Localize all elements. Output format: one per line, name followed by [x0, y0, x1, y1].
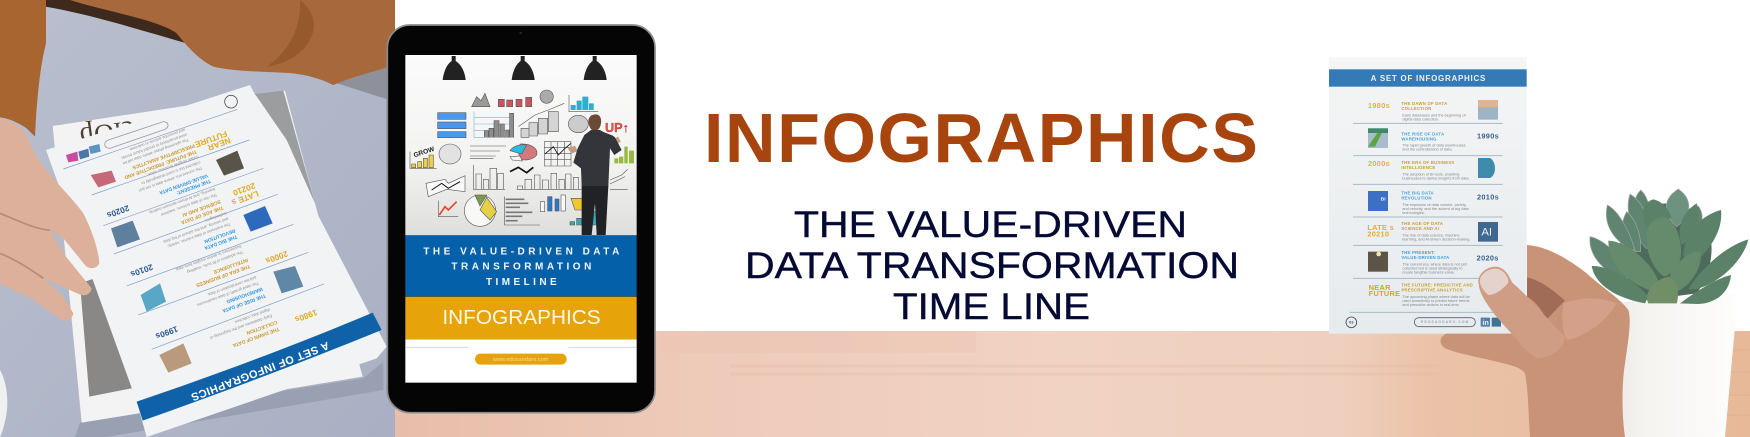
brochure headings: VALUE-DRIVEN DATA — [158, 172, 209, 196]
card years: 1980s — [1368, 101, 1390, 110]
ceiling lamps — [443, 56, 607, 80]
blue title band — [405, 235, 637, 296]
AI thumbnail label: AI — [1481, 226, 1492, 238]
card descriptions: and the centralization of data. — [1402, 148, 1453, 152]
magazine masthead: clOp — [78, 114, 137, 152]
map chart — [426, 176, 465, 197]
card headings: WAREHOUSING — [1401, 137, 1437, 142]
brochure descriptions — [121, 127, 273, 341]
linkedin icon — [1481, 318, 1490, 327]
brochure thumbnails — [66, 144, 303, 373]
card years: 2020s — [1477, 253, 1499, 262]
brochure headings: REVOLUTION — [203, 227, 236, 244]
mountain sketch — [472, 93, 490, 107]
card descriptions: learning, and AI-driven decision-making. — [1402, 237, 1470, 241]
brochure headings: THE ERA OF BUSINESS — [195, 263, 251, 288]
grid chart — [474, 112, 514, 137]
front leaves — [1608, 217, 1701, 303]
brochure years — [105, 129, 319, 342]
card thumbnails — [1368, 100, 1498, 272]
twitter icon — [1492, 318, 1501, 327]
card descriptions: collected but is used strategically to — [1402, 266, 1463, 270]
small bars — [540, 202, 545, 212]
brochure descriptions: learning, and AI-driven decision-making. — [148, 187, 216, 216]
brochure descriptions: and velocity, and the advent of big data — [162, 216, 229, 245]
card years: 1990s — [1477, 131, 1499, 140]
card years: 2010s — [1477, 192, 1499, 201]
brochure years: 1990s — [154, 324, 179, 342]
bar chart two — [517, 173, 582, 189]
brochure years: 2020s — [105, 203, 131, 221]
linkedin glyph: in — [1482, 318, 1489, 327]
subtitle — [745, 204, 1239, 327]
tablet body — [387, 25, 655, 413]
card descriptions: create tangible business value. — [1402, 270, 1455, 274]
orange band — [405, 297, 637, 339]
brochure page badge — [225, 95, 237, 108]
finger creases — [0, 213, 50, 278]
middle leaves — [1592, 199, 1748, 304]
sweater shadow — [45, 0, 200, 47]
brochure descriptions: The explosion of data volume, variety, — [167, 222, 231, 249]
card years: 20210 — [1367, 230, 1389, 239]
card descriptions: The rise of data science, machine — [1402, 233, 1460, 237]
card — [1329, 57, 1527, 334]
card headings — [1401, 101, 1473, 293]
magazine photo — [80, 267, 157, 397]
brochure headings: THE RISE OF DATA — [221, 292, 266, 314]
sleeve — [0, 0, 46, 137]
brochure descriptions: The current era, where data is not just — [137, 166, 203, 194]
brochure years: 2010s — [129, 262, 154, 280]
card descriptions: technologies. — [1402, 211, 1425, 215]
right lines — [610, 169, 628, 189]
right scene: card — [1329, 57, 1527, 334]
brochure descriptions: businesses to derive insights from data. — [175, 244, 242, 273]
hands — [568, 137, 621, 154]
card headings: INTELLIGENCE — [1401, 165, 1435, 170]
card headings: COLLECTION — [1401, 106, 1431, 111]
brochure descriptions: create tangible business value. — [146, 154, 199, 178]
left hand — [0, 118, 99, 320]
card headings: THE DAWN OF DATA — [1401, 101, 1448, 106]
yellow folder — [571, 198, 582, 210]
brochure headings: INTELLIGENCE — [212, 256, 249, 275]
BI thumbnail label: BI — [1381, 196, 1386, 202]
trousers — [582, 186, 608, 235]
subtitle: TIME LINE — [893, 286, 1090, 327]
3D pie — [568, 115, 588, 133]
card descriptions: The rapid growth of data warehouses — [1402, 144, 1466, 148]
brochure years: FUTURE — [193, 129, 229, 150]
page badge — [1346, 317, 1357, 328]
index finger shadow — [1527, 277, 1565, 319]
card headings: SCIENCE AND AI — [1401, 226, 1439, 231]
subtitle: THE VALUE-DRIVEN — [794, 204, 1187, 245]
title band text: TIMELINE — [486, 277, 557, 288]
card headings: THE BIG DATA — [1401, 191, 1435, 196]
grow chart — [410, 152, 437, 168]
card header text: A SET OF INFOGRAPHICS — [1371, 74, 1486, 83]
card headings: THE AGE OF DATA — [1401, 221, 1444, 226]
green bars — [614, 147, 634, 163]
palm and fingers — [1441, 245, 1630, 437]
coloured pie — [518, 144, 537, 160]
blue list blocks — [438, 113, 466, 119]
brochure years: 1980s — [293, 307, 319, 325]
brochure banner — [137, 313, 382, 421]
brochure years: 2000s — [264, 249, 289, 266]
drum diagram — [439, 144, 461, 164]
brochure banner text: A SET OF INFOGRAPHICS — [189, 339, 331, 403]
card descriptions: Early databases and the beginning of — [1402, 113, 1466, 117]
card descriptions — [1402, 113, 1470, 307]
thumb — [1478, 267, 1565, 358]
card descriptions: The upcoming phase where data will be — [1402, 295, 1470, 299]
GROW label: GROW — [413, 146, 436, 159]
UP label: UP↑ — [605, 121, 629, 135]
big pie — [464, 195, 496, 226]
teal bars — [570, 212, 597, 225]
url pill — [475, 354, 567, 365]
card years — [1367, 101, 1499, 298]
title: INFOGRAPHICS — [704, 99, 1258, 177]
brochure descriptions: The upcoming phase where data will be — [121, 137, 190, 166]
brochure descriptions: collected but is used strategically to — [140, 160, 201, 186]
hatched circle — [540, 90, 553, 103]
plant — [1590, 189, 1748, 304]
left photo: brochure on table — [0, 0, 395, 437]
sweater fold — [267, 0, 314, 67]
brochure years: 20210 — [231, 181, 257, 198]
brochure years: LATE s — [230, 189, 260, 208]
brochure headings: PRESCRIPTIVE ANALYTICS — [131, 142, 195, 171]
brochure descriptions: used proactively to predict future trends — [121, 132, 188, 161]
brochure headings: THE BIG DATA — [203, 233, 238, 251]
url pill text: EDOSAODARO.COM — [1421, 320, 1469, 324]
card descriptions: digital data collection. — [1402, 117, 1439, 121]
card headings: VALUE-DRIVEN DATA — [1401, 255, 1450, 260]
bar chart one — [473, 165, 505, 189]
brochure descriptions: The rise of data science, machine — [160, 192, 218, 218]
card years: FUTURE — [1369, 289, 1400, 298]
brochure sheet — [46, 85, 387, 437]
card header — [1329, 69, 1527, 87]
brochure descriptions: digital data collection. — [233, 307, 271, 325]
brochure headings: SCIENCE AND AI — [181, 198, 221, 218]
card descriptions: used proactively to predict future trends — [1402, 299, 1469, 303]
card years: 2000s — [1368, 159, 1390, 168]
card rows — [1349, 123, 1503, 312]
brochure headings: THE DAWN OF DATA — [231, 325, 280, 348]
card years: NEAR — [1369, 283, 1391, 292]
squiggle — [510, 167, 533, 173]
back magazine — [53, 91, 363, 423]
sweater — [70, 0, 395, 85]
man in suit — [568, 114, 622, 235]
screen photo — [405, 55, 637, 235]
card headings: THE FUTURE: PREDICTIVE AND — [1401, 283, 1473, 288]
brochure descriptions: and the centralization of data. — [207, 275, 257, 298]
brochure headings: WAREHOUSING — [225, 285, 263, 304]
card descriptions: and velocity, and the advent of big data — [1402, 207, 1470, 211]
jacket — [573, 130, 622, 187]
brochure descriptions: The rapid growth of data warehouses — [196, 281, 260, 308]
tablet camera — [519, 32, 522, 34]
plant pot — [1610, 293, 1738, 437]
title band text: TRANSFORMATION — [451, 262, 591, 273]
brochure years: NEAR — [206, 135, 232, 153]
table top — [0, 0, 395, 437]
back leaves — [1590, 189, 1702, 278]
card headings: THE PRESENT: — [1401, 250, 1435, 255]
card descriptions: The adoption of BI tools, enabling — [1402, 172, 1459, 176]
horizontal bars — [504, 197, 540, 225]
tablet infographics label: INFOGRAPHICS — [442, 306, 601, 329]
tablet — [387, 25, 655, 413]
url pill — [1414, 318, 1475, 327]
teal chart — [569, 95, 598, 112]
title band text — [423, 246, 619, 288]
3D columns — [521, 112, 558, 137]
card descriptions: and prescribe actions in real-time. — [1402, 303, 1460, 307]
badge number: 03 — [1349, 321, 1353, 325]
brochure descriptions: The adoption of BI tools, enabling — [187, 250, 244, 275]
brochure headings — [123, 142, 280, 348]
tablet wall charts — [410, 90, 634, 235]
white footer — [405, 339, 637, 383]
red cans — [498, 97, 532, 107]
subtitle: DATA TRANSFORMATION — [745, 245, 1239, 286]
grey trousers — [337, 63, 395, 102]
card descriptions: The explosion of data volume, variety, — [1402, 203, 1467, 207]
magazine shadow — [75, 362, 383, 437]
brochure descriptions: and prescribe actions in real-time. — [128, 127, 186, 153]
arrows — [470, 146, 506, 159]
right hand — [1441, 245, 1630, 437]
brochure rows — [63, 109, 324, 349]
knuckle highlight — [1562, 298, 1617, 340]
plant core — [1618, 203, 1712, 300]
brochure descriptions: Early databases and the beginning of — [209, 313, 273, 341]
desk surface — [395, 331, 1750, 437]
brochure descriptions: technologies. — [204, 211, 227, 224]
card descriptions: businesses to derive insights from data. — [1402, 176, 1470, 180]
card headings: THE ERA OF BUSINESS — [1401, 160, 1455, 165]
magazine photo top right — [255, 91, 315, 203]
footer rules — [405, 346, 637, 349]
title band text: THE VALUE-DRIVEN DATA — [423, 246, 619, 257]
card years: LATE s — [1367, 223, 1394, 232]
brochure headings: THE PRESENT: — [175, 177, 211, 196]
card headings: THE RISE OF DATA — [1401, 131, 1445, 136]
card descriptions: The current era, where data is not just — [1402, 262, 1468, 266]
thumbnail — [1480, 269, 1508, 295]
url text: www.edosaodaro.com — [492, 357, 549, 363]
card headings: PRESCRIPTIVE ANALYTICS — [1401, 288, 1463, 293]
line chart grid — [544, 142, 571, 166]
card headings: REVOLUTION — [1401, 196, 1432, 201]
brochure headings: THE FUTURE: PREDICTIVE AND — [123, 148, 197, 180]
red line chart — [438, 201, 458, 217]
cup — [0, 370, 7, 437]
brochure headings: THE AGE OF DATA — [180, 204, 224, 225]
brochure headings: COLLECTION — [245, 319, 278, 336]
brochure url pill — [105, 122, 168, 148]
head — [588, 114, 601, 131]
